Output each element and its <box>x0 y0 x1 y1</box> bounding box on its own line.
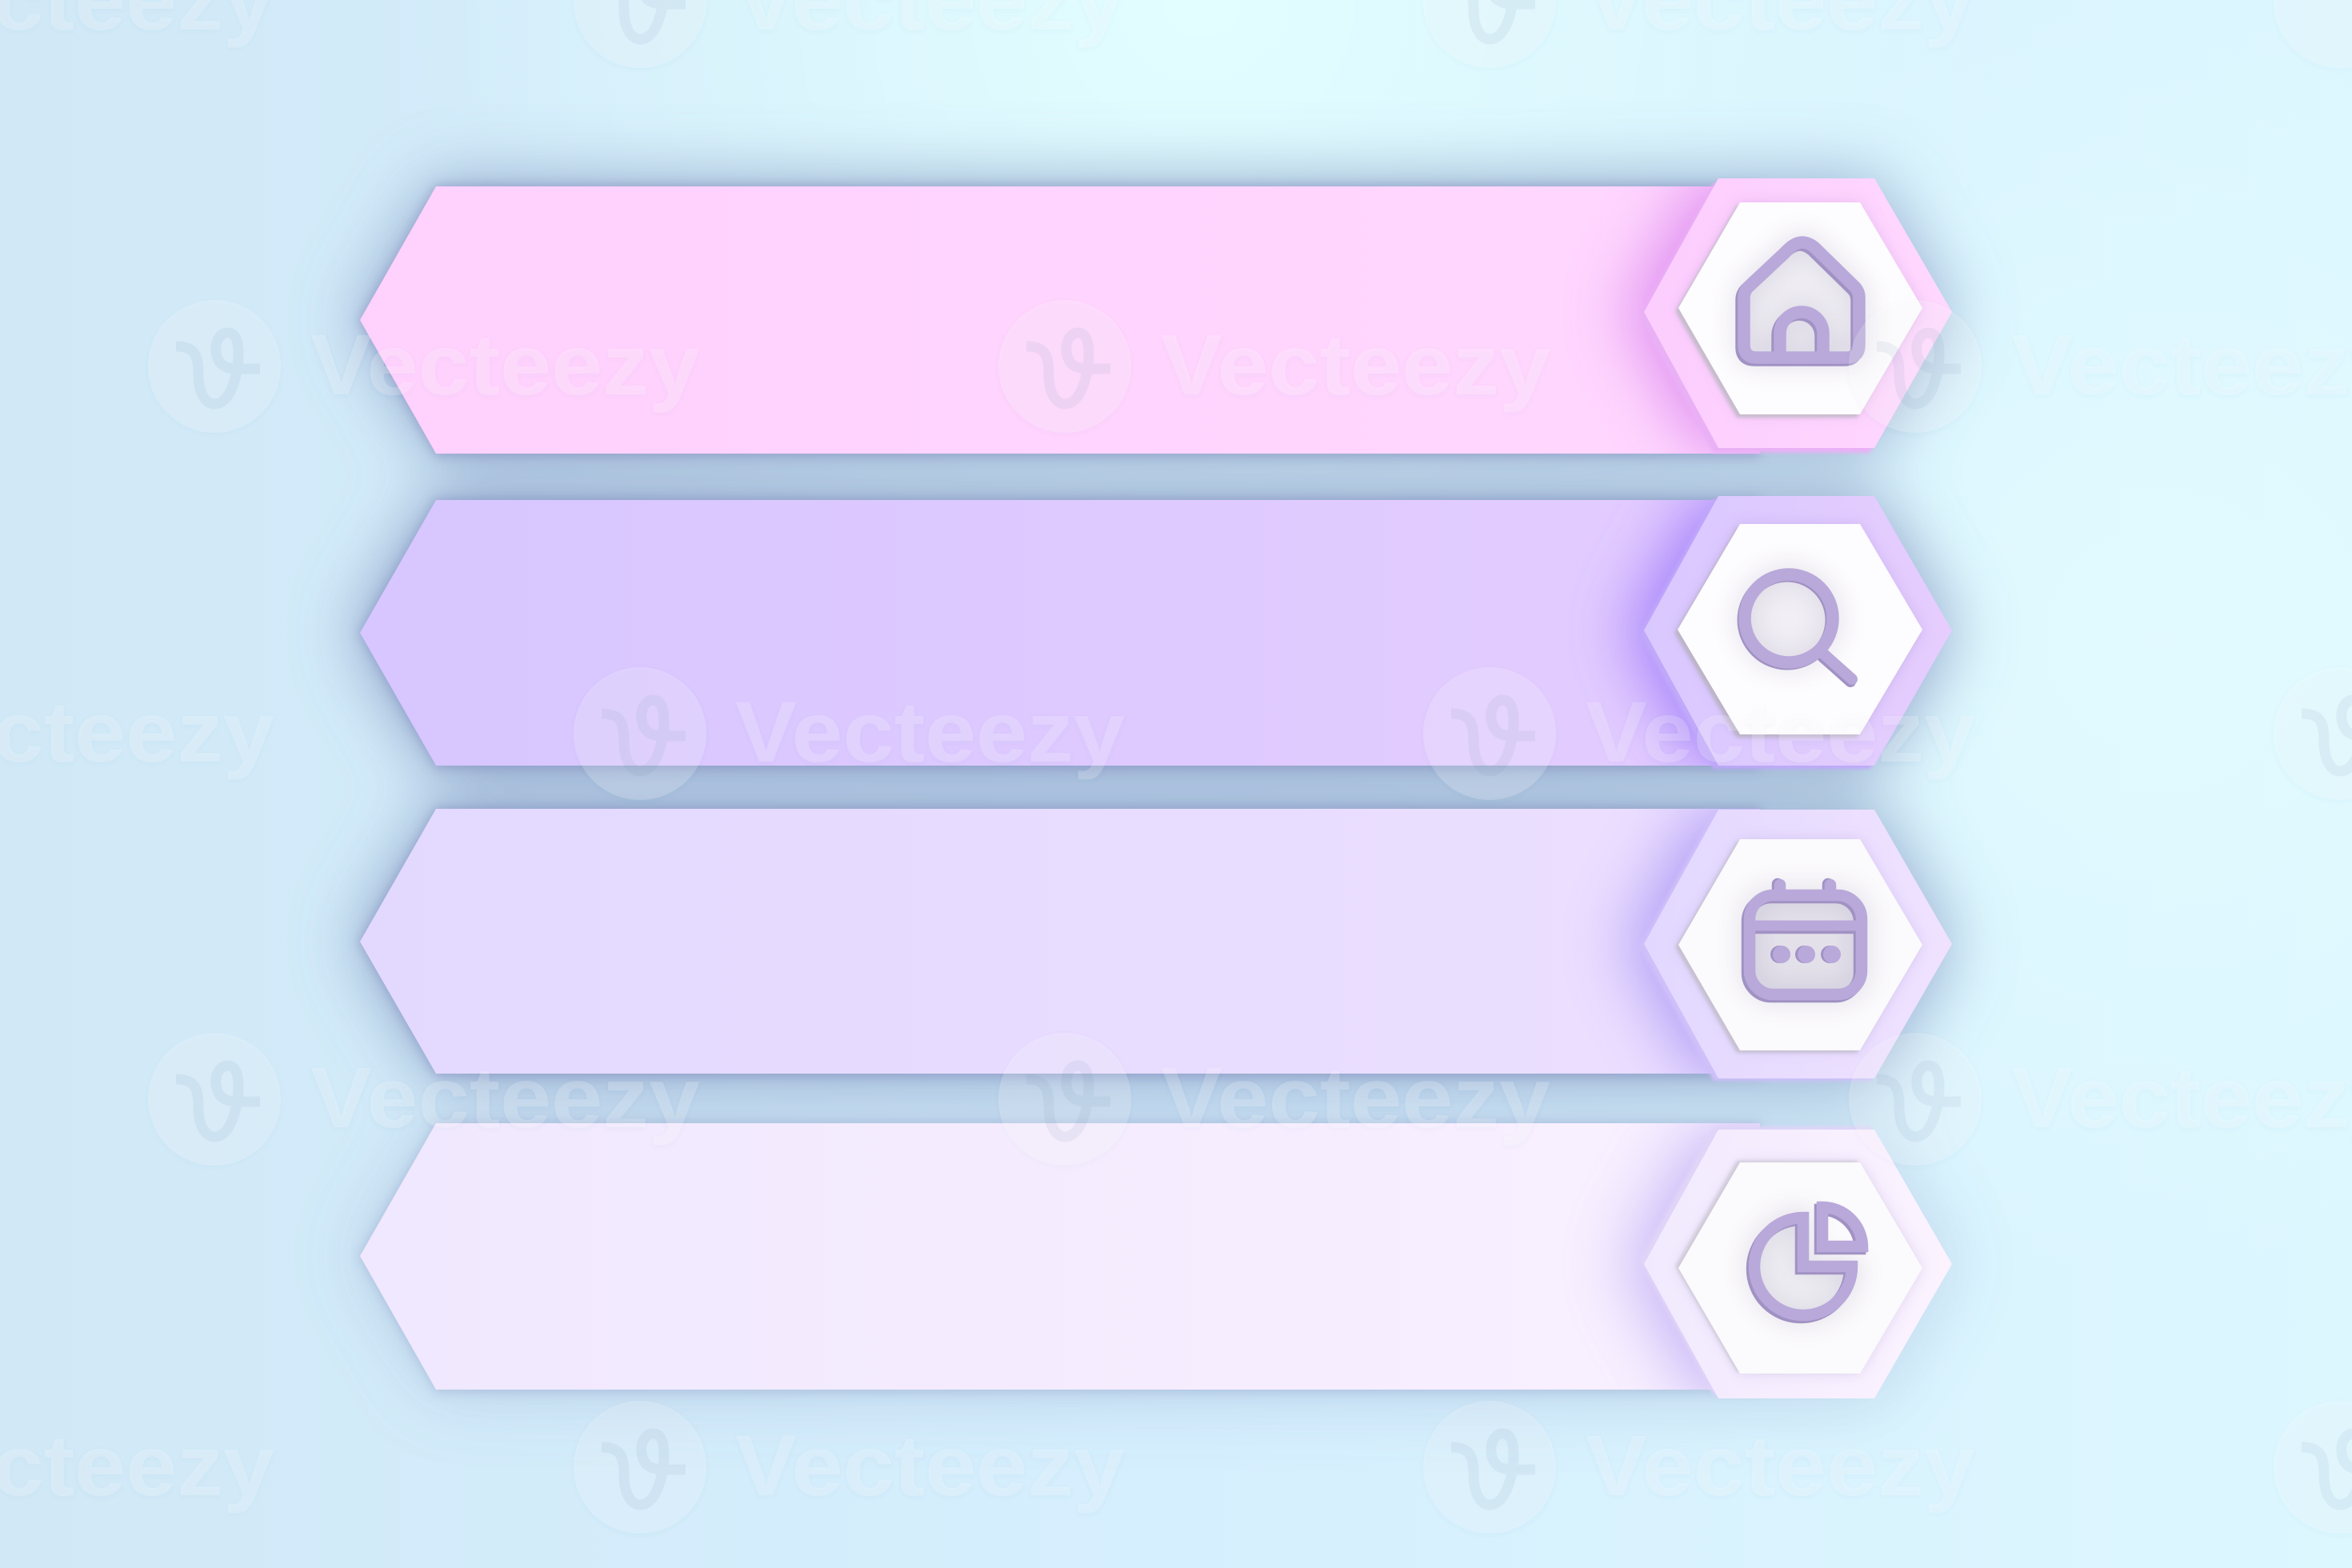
icon: magnifying glass <box>1743 574 1852 682</box>
hexagon 1 badge <box>1626 178 1952 453</box>
watermark overlay: Vecteezy <box>1161 1049 1550 1146</box>
hexagon 4 badge <box>1626 1126 1952 1398</box>
icon: pie chart <box>1752 1207 1862 1318</box>
bar 1 body <box>360 186 1760 454</box>
bar 3 body <box>360 809 1760 1074</box>
watermark overlay: Vecteezy <box>735 683 1125 780</box>
panel: bar 1 pink <box>360 178 1952 454</box>
panel: bar 2 violet <box>360 496 1952 769</box>
hexagon 3 badge <box>1626 810 1952 1081</box>
watermark overlay: Vecteezy <box>735 1417 1125 1514</box>
watermark overlay: Vecteezy <box>310 1049 700 1146</box>
icon: house <box>1742 242 1859 360</box>
bar 4 body <box>360 1123 1760 1390</box>
watermark overlay: Vecteezy <box>1586 1417 1975 1514</box>
panel: bar 3 lavender <box>360 809 1952 1081</box>
icon: calendar <box>1747 884 1862 997</box>
watermark overlay: Vecteezy <box>1161 316 1550 413</box>
panel: bar 4 pale lilac <box>360 1123 1952 1398</box>
watermark overlay: Vecteezy <box>1586 683 1975 780</box>
watermark overlay: Vecteezy <box>310 316 700 413</box>
hexagon 2 badge <box>1626 496 1952 769</box>
soft shadows behind bars <box>356 178 1952 1402</box>
bar 2 body <box>360 500 1760 766</box>
